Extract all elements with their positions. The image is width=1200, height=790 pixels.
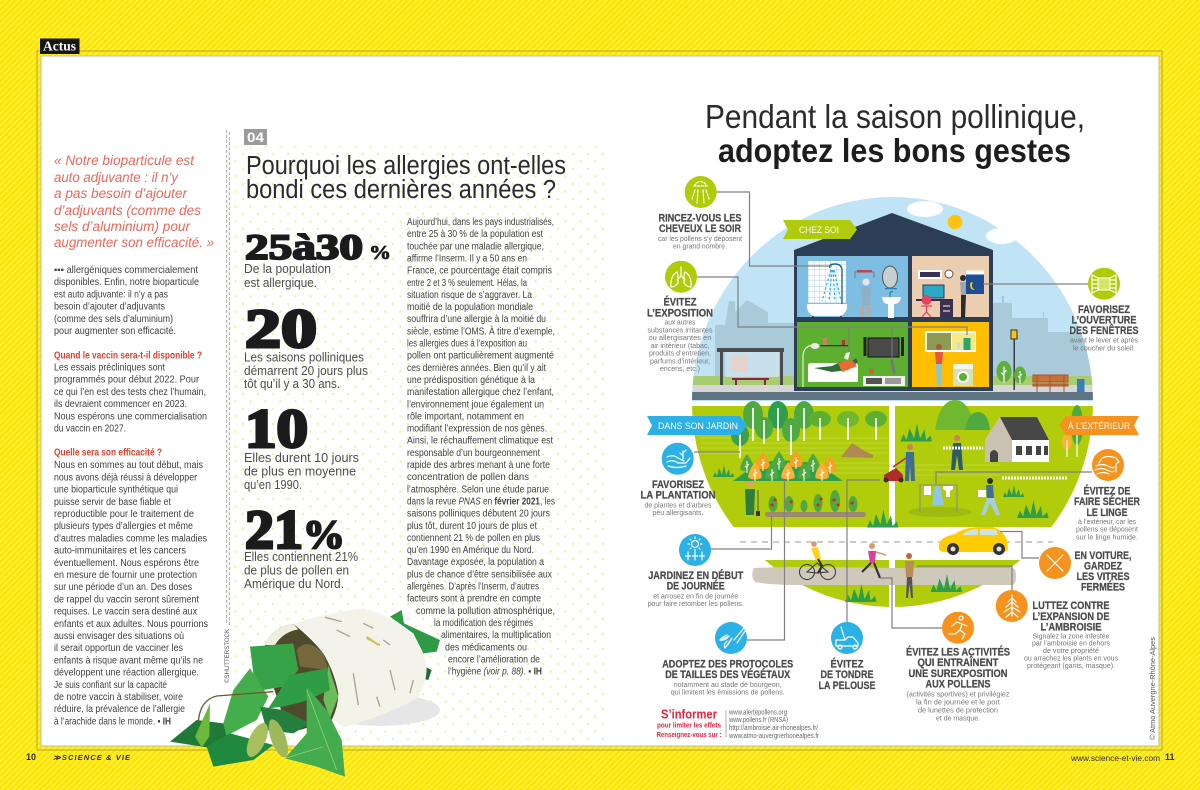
- pull quote: a pas besoin d’ajouter: [54, 186, 188, 201]
- text block: interview left column: est auto adjuvante: il n’y a pas: [54, 289, 168, 300]
- callout: avoid drying laundry outside: à l’extérieur, car les: [1078, 517, 1136, 526]
- stat: 20: Les saisons polliniques: [244, 350, 364, 364]
- text block: interview left column: Nous en sommes au tout début, mais: [54, 460, 203, 471]
- green lawns: [690, 406, 1095, 610]
- callout: keep car windows closed: LES VITRES: [1076, 571, 1130, 583]
- callout: avoid mowing: ÉVITEZ: [830, 658, 864, 670]
- stat: 21 %: [244, 499, 358, 591]
- stat: 25 à 30 %: %: [369, 242, 391, 264]
- text block: interview left column: disponibles. Enfin, notre bioparticule: [54, 277, 199, 288]
- callout: avoid exposure: encens, etc.): [660, 364, 700, 373]
- icon: lungs: [665, 261, 697, 293]
- ribbon: DANS SON JARDIN: DANS SON JARDIN: [658, 421, 738, 432]
- pull quote: d’adjuvants (comme des: [54, 203, 201, 218]
- callout: avoid drying laundry outside: [1074, 449, 1140, 542]
- callout: avoid exposure: L’EXPOSITION: [647, 308, 713, 320]
- callout: avoid overexposing activities: AUX POLLENS: [926, 678, 990, 690]
- text block: interview left column: reproductible pour le traitement de: [54, 509, 195, 520]
- office: [916, 270, 984, 318]
- information box: S'informer: S’informer: [661, 706, 717, 722]
- callout: fight ragweed: ou arrachez les plants en vous: [1024, 654, 1118, 662]
- text block: article column: entre 2 et 3 % seulement. Hélas, la: [407, 278, 527, 289]
- callout: avoid overexposing activities: et de masque.: [936, 714, 980, 722]
- stat: 10: qu’en 1990.: [244, 477, 302, 492]
- gardener near the house: [943, 435, 1068, 478]
- woman carrying laundry basket: [978, 478, 1000, 515]
- article heading: [246, 152, 566, 204]
- callout: rinse hair: car les pollens s’y déposent: [658, 234, 742, 243]
- callout: favour planting: LA PLANTATION: [640, 490, 716, 502]
- callout: fight ragweed: L’AMBROISIE: [1040, 622, 1102, 634]
- icon: shirt in the wind: [1092, 449, 1124, 481]
- footer: left folio: [26, 752, 131, 762]
- text block: interview left column: enfants à risque avant même qu’ils ne: [54, 655, 203, 666]
- stat: 20: [244, 298, 368, 391]
- text block: interview left column: nous avons déjà réussi à développer: [54, 472, 198, 483]
- callout: garden early in the day: et arrosez en fin de journée: [653, 592, 738, 600]
- text block: interview left column: Quand le vaccin sera-t-il disponible ?: [54, 350, 202, 362]
- infographic credit: © Atmo Auvergne-Rhône-Alpes: [1148, 637, 1157, 740]
- stat: 25 à 30 %: 25à30: [245, 227, 363, 267]
- text block: article column: l’atmosphère. Selon une étude parue: [407, 484, 549, 495]
- text block: article column: comme la pollution atmosphérique,: [416, 606, 555, 617]
- callout: open windows: avant le lever et après: [1070, 336, 1138, 344]
- text block: interview left column: Les essais précliniques sont: [54, 362, 165, 374]
- text block: article column: l’hygiène (voir p. 88). ▪ IH: [448, 667, 542, 678]
- text block: article column: affirme l’Inserm. Il y a 50 ans en: [407, 254, 527, 264]
- stat: 25 à 30 %: De la population: [244, 261, 331, 276]
- callout: pruning protocols: qui limitent les émissions de pollens.: [671, 688, 785, 696]
- text block: article column: contiennent 21 % de pollen en plus: [407, 533, 540, 544]
- text block: article column: les allergies dues à l’exposition au: [407, 338, 527, 350]
- callout: garden early in the day: pour faire retomber les pollens.: [648, 599, 744, 608]
- illustration: house and neighbourhood scene: [690, 195, 1095, 401]
- callout: fight ragweed: protégeant (gants, masque).: [1027, 661, 1115, 670]
- callout: keep car windows closed: GARDEZ: [1084, 560, 1122, 572]
- text block: interview left column: plusieurs types d’allergies et même: [54, 521, 193, 532]
- text block: interview left column: besoin d’ajouter d’adjuvants: [54, 302, 165, 313]
- text block: article column: facteurs sont à prendre en compte: [407, 594, 541, 605]
- infographic title: adoptez les bons gestes: [718, 132, 1071, 169]
- information box: S'informer: www.atmo-auvergnerhonealpes.fr: [728, 733, 820, 740]
- callout: garden early in the day: JARDINEZ EN DÉBUT: [648, 569, 744, 582]
- stat: 21 %: de plus de pollen en: [244, 562, 349, 578]
- text block: interview left column: puisse servir de base fiable et: [54, 497, 171, 508]
- callout: avoid overexposing activities: QUI ENTRAÎNENT: [918, 656, 999, 669]
- section tag: Actus: Actus: [43, 40, 77, 54]
- text block: interview left column: il serait opportun de vacciner les: [54, 643, 183, 654]
- text block: interview left column: programmés pour début 2022. Pour: [54, 375, 200, 386]
- text block: interview left column: (comme des sels d’aluminium): [54, 314, 173, 325]
- pull quote: « Notre bioparticule est: [54, 153, 195, 168]
- callout: keep car windows closed: FERMÉES: [1081, 580, 1125, 594]
- callout: keep car windows closed: EN VOITURE,: [1074, 550, 1132, 562]
- infographic title: Pendant la saison pollinique,: [705, 98, 1085, 135]
- text block: interview left column: réduire, la prévalence de l’allergie: [54, 704, 185, 715]
- callout: avoid exposure: ou allergisantes en: [648, 333, 712, 342]
- icon: ragweed leaf: [996, 590, 1028, 622]
- article heading: bondi ces dernières années ?: [246, 176, 556, 204]
- house: [794, 213, 993, 391]
- information box: S'informer: www.pollens.fr (RNSA): [728, 717, 788, 724]
- text block: article column: dans la revue PNAS en février 2021, les: [407, 496, 555, 508]
- text block: article column: encore l’amélioration de: [448, 654, 540, 665]
- text block: interview left column: éventuellement. Nous espérons être: [54, 558, 200, 569]
- footer: left folio: ≫SCIENCE & VIE: [53, 753, 131, 762]
- callout: avoid drying laundry outside: pollens se déposent: [1076, 524, 1138, 534]
- callout: fight ragweed: [996, 590, 1118, 670]
- text block: article column: saisons polliniques débutent 20 jours: [407, 509, 550, 520]
- runner: [862, 543, 886, 578]
- text block: interview left column: Je suis confiant sur la capacité: [54, 680, 167, 691]
- ribbon: CHEZ SOI: CHEZ SOI: [799, 225, 839, 236]
- callout: keep car windows closed: [1039, 547, 1132, 594]
- footer: left folio: 10: [26, 752, 36, 762]
- stat: 10: de plus en moyenne: [244, 464, 356, 478]
- pull quote: auto adjuvante : il n’y: [54, 170, 179, 185]
- callout: rinse hair: en grand nombre.: [673, 242, 727, 250]
- text block: article column: concentration de pollen dans: [407, 472, 529, 483]
- text block: article column: des médicaments ou: [445, 642, 527, 653]
- ribbon: À L'EXTÉRIEUR: À L’EXTÉRIEUR: [1068, 421, 1130, 432]
- pull quote: [54, 153, 214, 250]
- callout: rinse hair: [658, 176, 742, 250]
- text block: article column: Ainsi, le réchauffement climatique est: [407, 436, 553, 447]
- callout: avoid mowing: LA PELOUSE: [818, 680, 876, 692]
- callout: avoid overexposing activities: [906, 612, 1010, 722]
- callout: avoid exposure: produits d’entretien,: [649, 348, 711, 358]
- kitchen: [925, 331, 976, 386]
- footer: right folio: 11: [1165, 752, 1175, 762]
- icon: sun over plants: [679, 534, 711, 566]
- text block: interview left column: du vaccin en 2027.: [54, 424, 126, 434]
- text block: article column: l’environnement joue également un: [407, 399, 544, 410]
- text block: article column: moitié de la population mondiale: [407, 302, 533, 313]
- text block: interview left column: aussi envisager des situations où: [54, 631, 184, 642]
- information box: S'informer: Renseignez-vous sur :: [656, 730, 722, 739]
- panel: dotted background: [232, 146, 604, 746]
- text block: article column: [407, 217, 555, 678]
- text block: article column: plus de chance d’être sensibilisée aux: [407, 569, 552, 580]
- photo credit: ©SHUTTERSTOCK: [223, 628, 231, 683]
- text block: article column: responsable d’un bourgeonnement: [407, 448, 540, 459]
- callout: favour planting: FAVORISEZ: [652, 479, 704, 491]
- number badge: 04: [244, 129, 267, 145]
- callout: avoid mowing: [818, 622, 876, 692]
- illustration: gardens and outdoor scene: [690, 400, 1095, 610]
- footer: right folio: www.science-et-vie.com: [1070, 754, 1160, 763]
- text block: article column: rôle important, notamment en: [407, 411, 524, 422]
- clothesline with laundry: [908, 485, 972, 517]
- street lamp, trees, bench and bin: [996, 330, 1084, 392]
- callout: avoid exposure: air intérieur (tabac,: [650, 341, 710, 350]
- callout: avoid exposure: [647, 261, 713, 373]
- information box: S'informer: http://ambroisie.air-rhonealpes.fr/: [729, 725, 818, 732]
- text block: interview left column: Nous espérons une commercialisation: [54, 411, 207, 422]
- callout: open windows: le coucher du soleil.: [1073, 344, 1135, 352]
- callout: fight ragweed: de votre propriété: [1043, 646, 1099, 655]
- text block: article column: entre 25 à 30 % de la population est: [407, 229, 543, 240]
- road markings: [740, 541, 1053, 543]
- text block: article column: alimentaires, la multiplication: [441, 630, 551, 641]
- stat: 20: tôt qu’il y a 30 ans.: [244, 376, 340, 391]
- callout: avoid drying laundry outside: LE LINGE: [1086, 507, 1128, 519]
- text block: article column: manifestation allergique chez l’enfant,: [407, 387, 554, 398]
- text block: interview left column: ▪▪▪ allergéniques commercialement: [54, 265, 198, 276]
- text block: interview left column: à l’arachide dans le monde. ▪ IH: [54, 716, 171, 727]
- yellow car: [939, 527, 1008, 555]
- callout: avoid overexposing activities: (activités sportives) et privilégiez: [906, 690, 1010, 698]
- information box: S'informer: www.alertepollens.org: [728, 710, 787, 716]
- text block: interview left column: d’autres maladies comme les maladies: [54, 533, 207, 544]
- text block: interview left column: pour augmenter son efficacité.: [54, 326, 176, 337]
- text block: interview left column: [54, 265, 208, 727]
- text block: interview left column: en mesure de fournir une protection: [54, 570, 197, 581]
- text block: article column: Davantage exposée, la population a: [407, 557, 544, 568]
- text block: article column: plus tôt, durent 10 jours de plus et: [407, 521, 537, 532]
- callout: avoid overexposing activities: la fin de journée et le port: [916, 698, 1000, 706]
- text block: article column: ces dernières années. Bien qu’il y ait: [407, 363, 546, 374]
- callout: avoid overexposing activities: UNE SUREXPOSITION: [908, 668, 1008, 680]
- callout: avoid overexposing activities: de lunettes de protection: [918, 706, 998, 714]
- birch trees in the garden: [731, 401, 887, 458]
- callout: open windows: FAVORISEZ: [1078, 304, 1130, 316]
- callout: pruning protocols: [662, 622, 793, 696]
- stat: 21 %: 21%: [245, 499, 345, 560]
- text block: interview left column: sur une période d’un an. Des doses: [54, 582, 192, 593]
- stat: 10: Elles durent 10 jours: [244, 450, 359, 465]
- callout: favour planting: peu allergisants.: [652, 508, 704, 517]
- article heading: Pourquoi les allergies ont-elles: [246, 152, 566, 180]
- sun: [948, 215, 962, 229]
- icon: secateurs: [715, 622, 747, 654]
- ribbon: À L'EXTÉRIEUR: [1059, 416, 1139, 435]
- icon: window with shutters: [1088, 268, 1120, 300]
- text block: article column: la modification des régimes: [434, 618, 533, 629]
- icon: hand and plant: [662, 443, 694, 475]
- stat: 20: démarrent 20 jours plus: [244, 363, 368, 378]
- text block: interview left column: Quelle sera son efficacité ?: [54, 448, 162, 458]
- callout: favour planting: [640, 443, 716, 517]
- callout: favour planting: de plantes et d’arbres: [644, 500, 712, 510]
- callout: garden early in the day: DE JOURNÉE: [667, 580, 725, 592]
- bus shelter: [717, 348, 784, 385]
- callout: fight ragweed: Signalez la zone infestée: [1032, 632, 1110, 640]
- callout: pruning protocols: DE TAILLES DES VÉGÉTAUX: [665, 668, 790, 681]
- callout: avoid mowing: DE TONDRE: [820, 669, 874, 681]
- infographic title: [705, 98, 1085, 169]
- ribbon: DANS SON JARDIN: [647, 416, 747, 435]
- callout: pruning protocols: ADOPTEZ DES PROTOCOLES: [662, 658, 793, 670]
- connector lines: [694, 192, 1092, 640]
- gardener with spade: [745, 481, 760, 516]
- text block: article column: touchée par une maladie allergique,: [407, 241, 544, 252]
- information box: S'informer: pour limiter les effets: [657, 720, 721, 730]
- callout: avoid exposure: parfums d’intérieur,: [650, 356, 710, 366]
- callout: pruning protocols: notamment au stade de bourgeon,: [674, 680, 782, 689]
- stat: 25 à 30 %: [244, 227, 391, 290]
- callout: open windows: [1070, 268, 1138, 352]
- stat: 20: 20: [245, 298, 317, 359]
- text block: article column: France, ce pourcentage était compris: [407, 266, 552, 277]
- bushes: [713, 424, 1048, 602]
- icon: shower: [685, 176, 717, 208]
- wavy column separator: [226, 130, 230, 625]
- callout: avoid exposure: ÉVITEZ: [664, 296, 697, 308]
- garden path: [752, 567, 1016, 585]
- vegetable bed: [765, 490, 866, 517]
- text block: article column: rapide des arbres menant à une forte: [407, 460, 550, 471]
- pull quote: augmenter son efficacité. »: [54, 235, 214, 250]
- text block: article column: modifiant l’expression de nos gènes.: [407, 424, 547, 435]
- text block: article column: pollen ont particulièrement augmenté: [407, 351, 554, 362]
- hills and cottage: [935, 400, 1083, 462]
- text block: article column: qu’en 1990 en Amérique du Nord.: [407, 545, 534, 556]
- icon: runner: [942, 612, 974, 644]
- text block: interview left column: développent une réaction allergique.: [54, 668, 199, 679]
- text block: interview left column: une bioparticule synthétique qui: [54, 485, 178, 496]
- text block: interview left column: ce qui l’en est des tests chez l’humain,: [54, 387, 206, 398]
- callout: avoid drying laundry outside: FAIRE SÉCHER: [1074, 495, 1140, 508]
- text block: article column: souffrira d’une allergie à la moitié du: [407, 314, 546, 325]
- text block: article column: allergènes. D’après l’Inserm, d’autres: [407, 582, 539, 592]
- text block: interview left column: de rappel du vaccin seront sûrement: [54, 594, 199, 605]
- callout: avoid exposure: aux autres: [664, 318, 696, 326]
- stat: 10: [244, 398, 359, 492]
- cyclist: [800, 541, 836, 580]
- callout: avoid drying laundry outside: sur le linge humide.: [1076, 532, 1138, 542]
- text block: article column: Aujourd’hui, dans les pays industrialisés,: [407, 217, 554, 228]
- sky: [690, 195, 1095, 401]
- stat: 25 à 30 %: est allergique.: [244, 275, 317, 290]
- compost pile: [841, 443, 873, 458]
- callout: open windows: L’OUVERTURE: [1072, 314, 1136, 326]
- text block: article column: situation risque de s’aggraver. La: [407, 290, 532, 301]
- photo: birch bark roll and leaves: [170, 608, 440, 777]
- pull quote: sels d’aluminium) pour: [54, 219, 190, 234]
- text block: article column: une prédisposition génétique à la: [407, 375, 535, 386]
- callout: rinse hair: CHEVEUX LE SOIR: [659, 223, 741, 235]
- stat: 21 %: Amérique du Nord.: [244, 576, 344, 591]
- number badge: 04: 04: [247, 129, 264, 145]
- callout: rinse hair: RINCEZ-VOUS LES: [658, 212, 742, 224]
- stat: 10: 10: [245, 398, 308, 459]
- orchard mound with small trees: [733, 450, 843, 481]
- callout: fight ragweed: LUTTEZ CONTRE: [1032, 600, 1110, 612]
- text block: interview left column: enfants et aux adultes. Nous pourrions: [54, 619, 208, 630]
- callout: open windows: DES FENÊTRES: [1070, 324, 1138, 337]
- text block: interview left column: auto-immunitaires et les cancers: [54, 546, 186, 557]
- text block: interview left column: de notre vaccin à stabiliser, voire: [54, 692, 183, 703]
- pedestrian with phone: [905, 553, 914, 598]
- callout: avoid exposure: substances irritantes: [648, 326, 713, 334]
- callout: fight ragweed: par l’ambroisie en dehors: [1032, 638, 1110, 648]
- callout: avoid drying laundry outside: ÉVITEZ DE: [1084, 484, 1130, 498]
- stat: 21 %: Elles contiennent 21%: [244, 549, 358, 564]
- footer: right folio: [1070, 752, 1175, 763]
- man with lawnmower: [884, 444, 915, 482]
- text block: interview left column: ils devraient commencer en 2023.: [54, 399, 187, 410]
- bathroom: [807, 261, 901, 318]
- information box: S'informer: [656, 706, 820, 740]
- callout: garden early in the day: [648, 534, 744, 608]
- callout: fight ragweed: L’EXPANSION DE: [1032, 611, 1110, 623]
- ribbon: CHEZ SOI: [783, 220, 857, 239]
- icon: cross: [1039, 547, 1071, 579]
- living room: [803, 327, 905, 387]
- icon: lawnmower: [831, 622, 863, 654]
- text block: interview left column: requises. Le vaccin sera destiné aux: [54, 607, 197, 618]
- text block: article column: siècle, estime l’OMS. À titre d’exemple,: [407, 326, 555, 337]
- callout: avoid overexposing activities: ÉVITEZ LES ACTIVITÉS: [906, 646, 1010, 658]
